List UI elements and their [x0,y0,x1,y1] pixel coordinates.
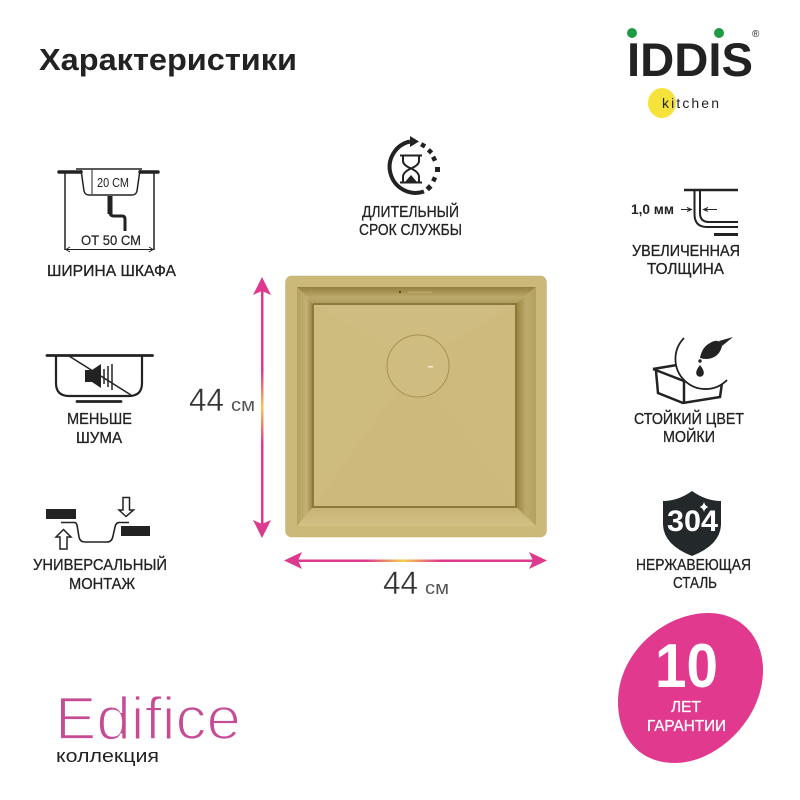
label: service life: СРОК СЛУЖБЫ [359,222,462,239]
rim [286,276,546,537]
label: height 44 cm: 44 [189,382,224,418]
arrow: horizontal dimension [284,552,547,569]
icon: wall thickness section [681,190,738,234]
label: height 44 cm [189,382,255,418]
icon: basin with paint brush [653,337,733,403]
drain [387,335,449,397]
label: less: МЕНЬШЕ [67,411,132,428]
label: universal: УНИВЕРСАЛЬНЫЙ [33,556,167,574]
icon: sink in cabinet [59,169,158,252]
bowl floor [313,304,516,507]
label: 20 cm: 20 СМ [97,176,129,190]
overflow slot [399,291,432,293]
label: from 50 cm: ОТ 50 СМ [81,232,141,248]
label: cabinet width: ШИРИНА ШКАФА [47,263,177,280]
badge: 10 year warranty: ЛЕТ [671,699,702,716]
badge: 10 year warranty: ГАРАНТИИ [647,718,726,735]
feature: cabinet width [47,169,177,280]
label: of the sink: МОЙКИ [663,428,715,446]
icon: top and under mount [46,498,150,549]
icon: hourglass with circular arrow [390,136,440,193]
feature: less noise [47,356,152,447]
label: thickness: ТОЛЩИНА [647,261,725,278]
label: steel: СТАЛЬ [673,575,717,592]
label: noise: ШУМА [76,430,123,447]
title: Характеристики [39,42,297,77]
label: long: ДЛИТЕЛЬНЫЙ [362,203,459,221]
collection name: Edifice [55,685,241,752]
icon: shield 304: 304 [667,505,718,538]
label: width 44 cm [383,565,449,601]
label: mounting: МОНТАЖ [69,576,136,593]
logo: IDDIS kitchen [627,28,760,118]
label: width 44 cm: см [425,578,449,598]
label: width 44 cm: 44 [383,565,418,601]
collection name: коллекция [56,746,159,766]
label: height 44 cm: см [231,395,255,415]
feature: durable colour [634,337,744,446]
icon: muted sink [47,356,152,402]
sink top view [286,276,546,537]
logo: IDDIS kitchen: IDDIS [627,33,753,86]
badge: 10 year warranty: 10 [655,632,718,701]
logo: IDDIS kitchen: ® [752,29,760,40]
feature: long service life [359,136,462,239]
label: stainless: НЕРЖАВЕЮЩАЯ [636,557,751,574]
arrow: vertical dimension [253,277,271,538]
label: 1.0 mm: 1,0 мм [631,201,674,217]
logo: IDDIS kitchen: kitchen [662,95,719,111]
label: increased: УВЕЛИЧЕННАЯ [632,243,740,260]
feature: universal mounting [33,498,167,593]
feature: stainless steel 304 [636,491,751,592]
bowl walls [297,287,536,526]
label: durable colour: СТОЙКИЙ ЦВЕТ [634,410,744,428]
feature: increased thickness [631,190,740,278]
badge: 10 year warranty [618,613,763,763]
